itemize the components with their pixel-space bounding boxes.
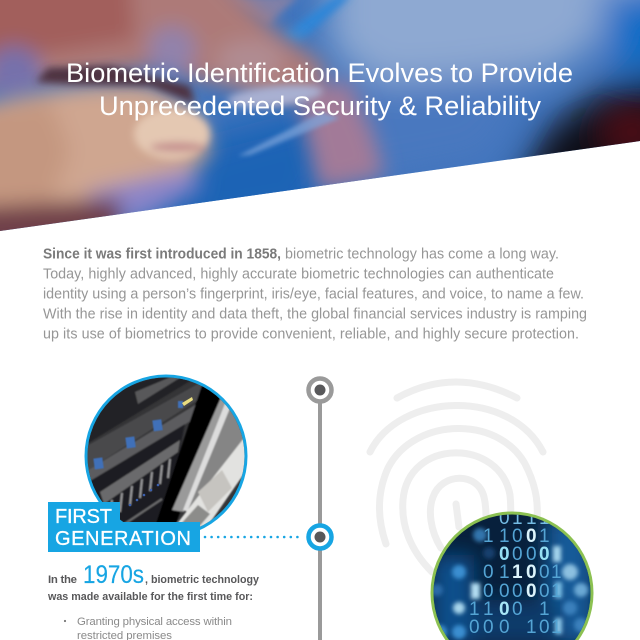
title: Biometric Identification Evolves to Provide <box>66 58 573 88</box>
digits: 00 <box>512 544 537 565</box>
rail <box>172 395 228 512</box>
digits: 000101 <box>469 617 562 638</box>
photo circle: binary code: 10 <box>512 562 537 583</box>
index finger <box>0 0 325 100</box>
side panel <box>188 410 243 508</box>
label: first generation: GENERATION <box>55 528 191 550</box>
photo circle: server rack <box>84 374 248 530</box>
bullet list <box>64 616 232 640</box>
heading: 1970s statement: 1970s <box>83 561 144 589</box>
thumb <box>0 84 210 212</box>
indicator light <box>182 397 193 406</box>
digits: 1101 <box>469 599 550 620</box>
drive bays <box>110 459 170 518</box>
fingerprint watermark <box>370 382 543 572</box>
photo circle: binary code: 00 <box>499 544 550 565</box>
finger shadow gap <box>36 66 195 104</box>
dotted connector <box>205 536 304 538</box>
label: first generation <box>48 502 200 552</box>
intro paragraph: up its use of biometrics to provide convenient, reliable, and highly secure protection. <box>43 326 579 342</box>
timeline line <box>318 392 322 640</box>
heading: 1970s statement: , biometric technology <box>145 574 260 586</box>
digits: 0101 <box>483 562 562 583</box>
black post <box>156 386 220 522</box>
title: Unprecedented Security & Reliability <box>99 91 542 121</box>
heading: 1970s statement <box>47 561 260 603</box>
blue tabs <box>93 401 183 469</box>
photo circle: binary code: 0 <box>499 599 510 620</box>
photo circle: binary code: 0 <box>526 581 537 602</box>
heading: 1970s statement: was made available for the first time for: <box>47 591 253 603</box>
title <box>66 58 573 121</box>
timeline node: first generation <box>308 526 332 548</box>
blurred background digits <box>431 528 588 639</box>
intro paragraph: Since it was first introduced in 1858, <box>43 246 281 262</box>
intro paragraph <box>43 246 587 342</box>
heading: 1970s statement: In the <box>48 574 77 586</box>
intro paragraph: identity using a person’s fingerprint, iris/eye, facial features, and voice, to name a few. <box>43 286 584 302</box>
intro paragraph: With the rise in identity and data theft, the global financial services industry is ramping <box>43 306 587 322</box>
thumbnail <box>134 109 210 159</box>
label: first generation: FIRST <box>55 506 112 528</box>
digits: 00001 <box>483 581 562 602</box>
fingertip highlight <box>226 81 324 111</box>
digits: 1101 <box>483 526 550 547</box>
bullet list: Granting physical access within <box>77 616 232 628</box>
digits: 0111 <box>499 508 550 529</box>
photo circle: binary code <box>430 508 595 640</box>
timeline start node <box>308 378 332 402</box>
digits <box>469 508 562 638</box>
intro paragraph: Today, highly advanced, highly accurate biometric technologies can authenticate <box>43 266 554 282</box>
lower right finger <box>300 80 385 190</box>
intro paragraph: biometric technology has come a long way. <box>285 246 559 262</box>
photo circle: binary code: 0 <box>526 526 537 547</box>
hero photo: fingers on touchscreen <box>0 0 640 250</box>
